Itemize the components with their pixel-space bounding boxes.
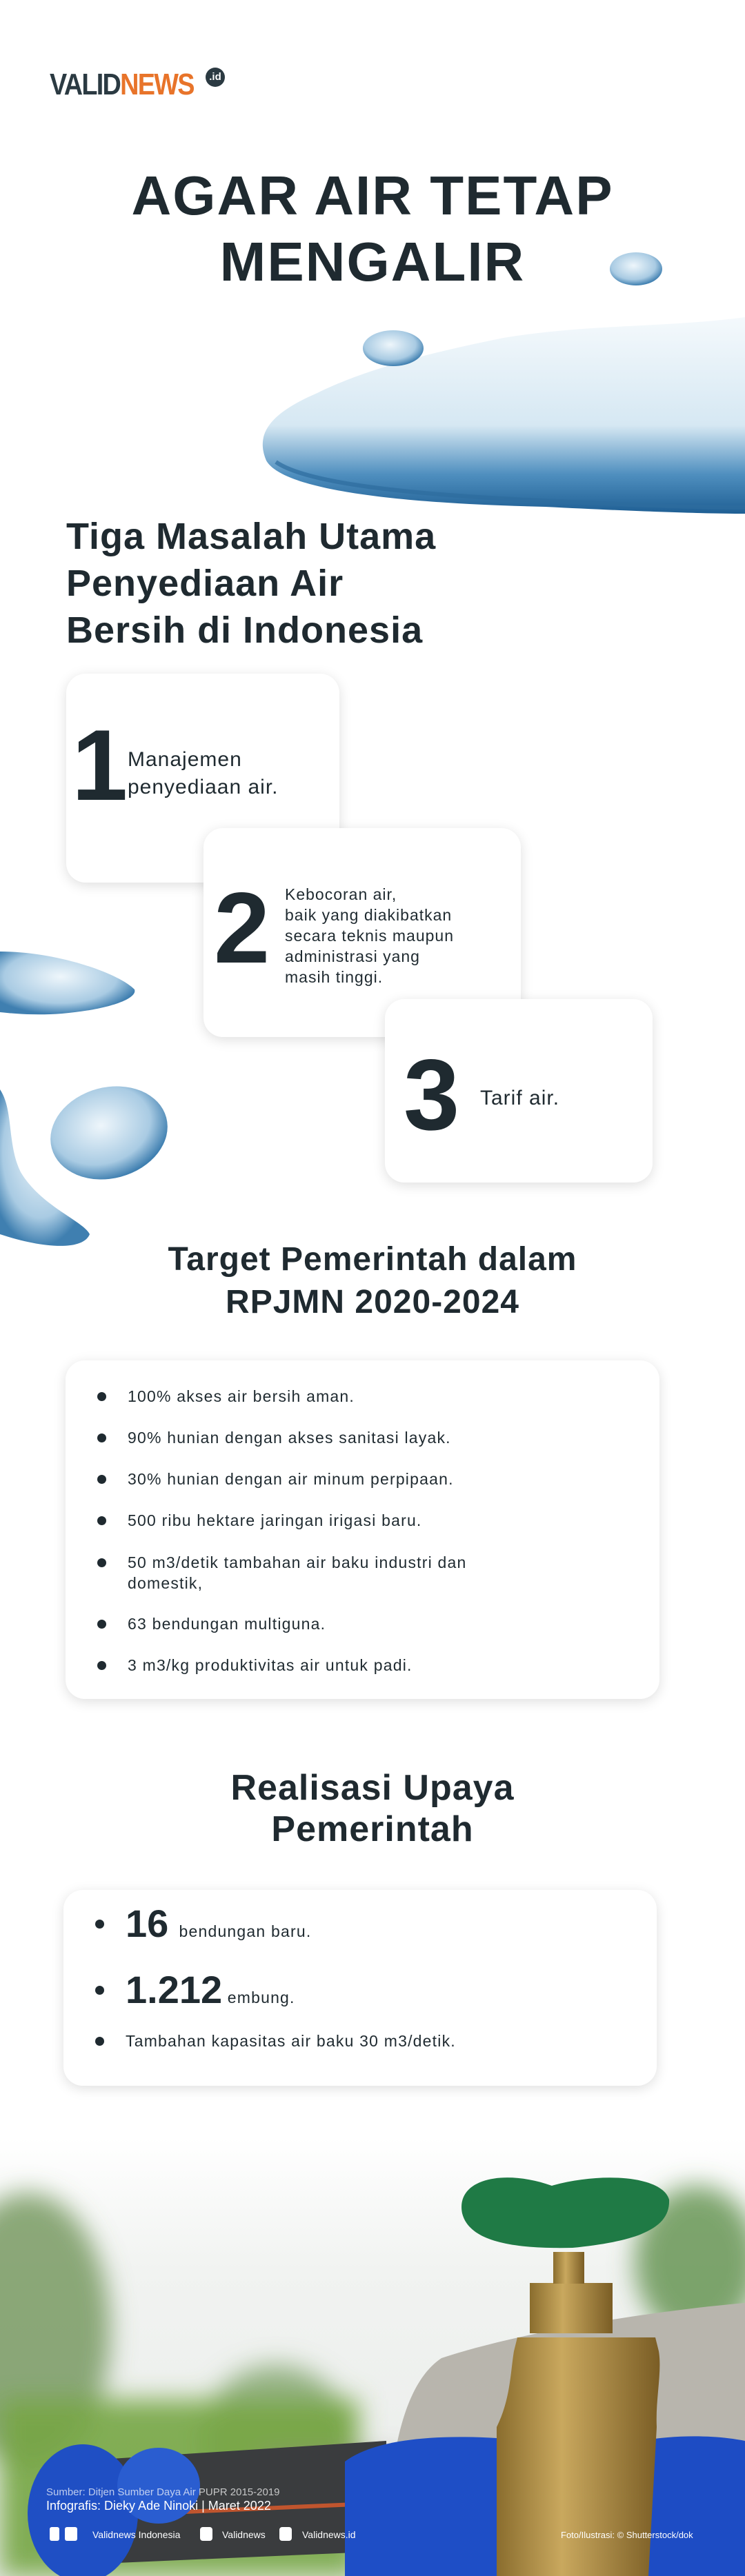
heading: tiga masalah: Bersih di Indonesia [66,610,423,651]
panel: targets list [66,1360,659,1699]
card 1 [66,674,339,883]
heading: target: Target Pemerintah dalam [168,1241,577,1278]
number 2: 2 [214,872,270,984]
panel: realisasi list: Tambahan kapasitas air baku 30 m3/detik. [126,2032,456,2050]
panel: targets list: 50 m3/detik tambahan air baku industri dan [128,1553,466,1571]
credits: Validnews [222,2529,266,2540]
number 1: 1 [72,709,128,821]
text 1: penyediaan air. [128,776,279,798]
heading: tiga masalah: Penyediaan Air [66,563,344,604]
text 2: Kebocoran air, [285,885,397,903]
title: AGAR AIR TETAP [131,165,614,226]
text 1 [128,748,279,798]
card 2 [203,828,521,1037]
panel: targets list: domestik, [128,1574,203,1592]
heading: target: RPJMN 2020-2024 [226,1284,519,1320]
text 3: Tarif air. [480,1087,559,1109]
panel: targets list: 100% akses air bersih aman. [128,1387,355,1405]
valve body [497,2337,659,2576]
title [131,165,614,292]
green handle [461,2177,669,2248]
number 3: 3 [404,1038,459,1151]
heading: tiga masalah [66,516,436,651]
panel: realisasi list: 16 bendungan baru. [126,1902,311,1945]
photo: water valve [0,2164,745,2576]
credits [46,2486,693,2541]
small drop on sheet [363,330,424,366]
credits: Sumber: Ditjen Sumber Daya Air PUPR 2015-2019 [46,2486,280,2498]
panel: targets list: 3 m3/kg produktivitas air untuk padi. [128,1656,413,1674]
heading: realisasi: Realisasi Upaya [230,1768,515,1808]
title: MENGALIR [220,231,525,292]
small drop upper right [610,252,662,285]
text 2: masih tinggi. [285,968,383,986]
panel: targets list: 90% hunian dengan akses sanitasi layak. [128,1429,451,1447]
panel: realisasi list: 1.212 embung. [126,1968,295,2011]
black pipe [69,2441,386,2565]
text 2: secara teknis maupun [285,927,454,945]
credits: Validnews Indonesia [92,2529,181,2540]
blue fittings [28,2444,138,2576]
text 2 [285,885,454,986]
credits: Validnews.id [302,2529,356,2540]
credits: Infografis: Dieky Ade Ninoki | Maret 2022 [46,2499,271,2513]
left water drops [0,952,168,1246]
text 2: administrasi yang [285,947,420,965]
heading: target [168,1241,577,1320]
big water drop [262,252,745,514]
panel: targets list: 63 bendungan multiguna. [128,1615,326,1633]
card 3 [385,999,653,1183]
logo: VALIDNEWS [50,68,194,101]
logo: .id [209,71,221,83]
panel: targets list: 500 ribu hektare jaringan irigasi baru. [128,1511,422,1529]
text 1: Manajemen [128,748,242,771]
text 2: baik yang diakibatkan [285,906,452,924]
heading: tiga masalah: Tiga Masalah Utama [66,516,436,557]
heading: realisasi [230,1768,515,1849]
heading: realisasi: Pemerintah [271,1809,474,1849]
gray tank [386,2303,745,2576]
credits: Foto/Ilustrasi: © Shutterstock/dok [561,2530,693,2540]
main sheet of water [263,317,745,514]
panel: targets list: 30% hunian dengan air minum perpipaan. [128,1470,454,1488]
panel: realisasi list [63,1890,657,2086]
